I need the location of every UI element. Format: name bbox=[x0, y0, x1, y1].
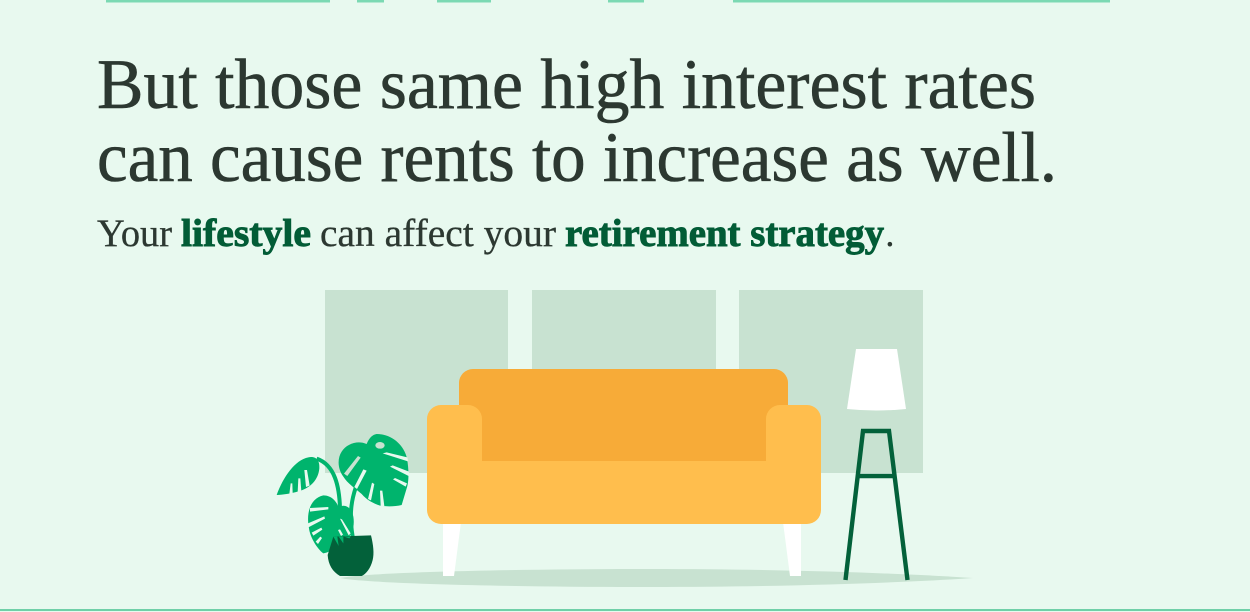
left leaf bbox=[277, 457, 319, 495]
sofa legs bbox=[443, 522, 801, 576]
lower leaf bbox=[308, 495, 354, 553]
large leaf slits bbox=[344, 442, 409, 506]
subtitle: retirement strategy bbox=[565, 212, 884, 255]
subtitle bbox=[97, 212, 895, 255]
subtitle: Your bbox=[97, 212, 172, 255]
leaf tips over pot bbox=[333, 537, 351, 546]
subtitle: . bbox=[885, 212, 895, 255]
icon: sofa bbox=[427, 369, 821, 576]
title: But those same high interest rates bbox=[97, 46, 1036, 124]
pot bbox=[328, 535, 373, 576]
title bbox=[97, 46, 1057, 197]
windows bbox=[325, 290, 923, 473]
floor shadow bbox=[340, 569, 973, 587]
subtitle: can affect your bbox=[320, 212, 556, 255]
icon: floor lamp bbox=[846, 349, 908, 580]
plant stems bbox=[317, 459, 363, 537]
sofa back bbox=[459, 369, 788, 469]
sofa body and arms bbox=[427, 405, 821, 524]
lamp stand bbox=[846, 431, 908, 580]
icon: potted plant bbox=[277, 434, 409, 576]
lower leaf slits bbox=[307, 507, 351, 544]
large leaf bbox=[339, 434, 408, 506]
title: can cause rents to increase as well. bbox=[97, 119, 1057, 197]
lamp shade bbox=[847, 349, 906, 410]
subtitle: lifestyle bbox=[181, 212, 311, 255]
left leaf slits bbox=[289, 470, 310, 494]
